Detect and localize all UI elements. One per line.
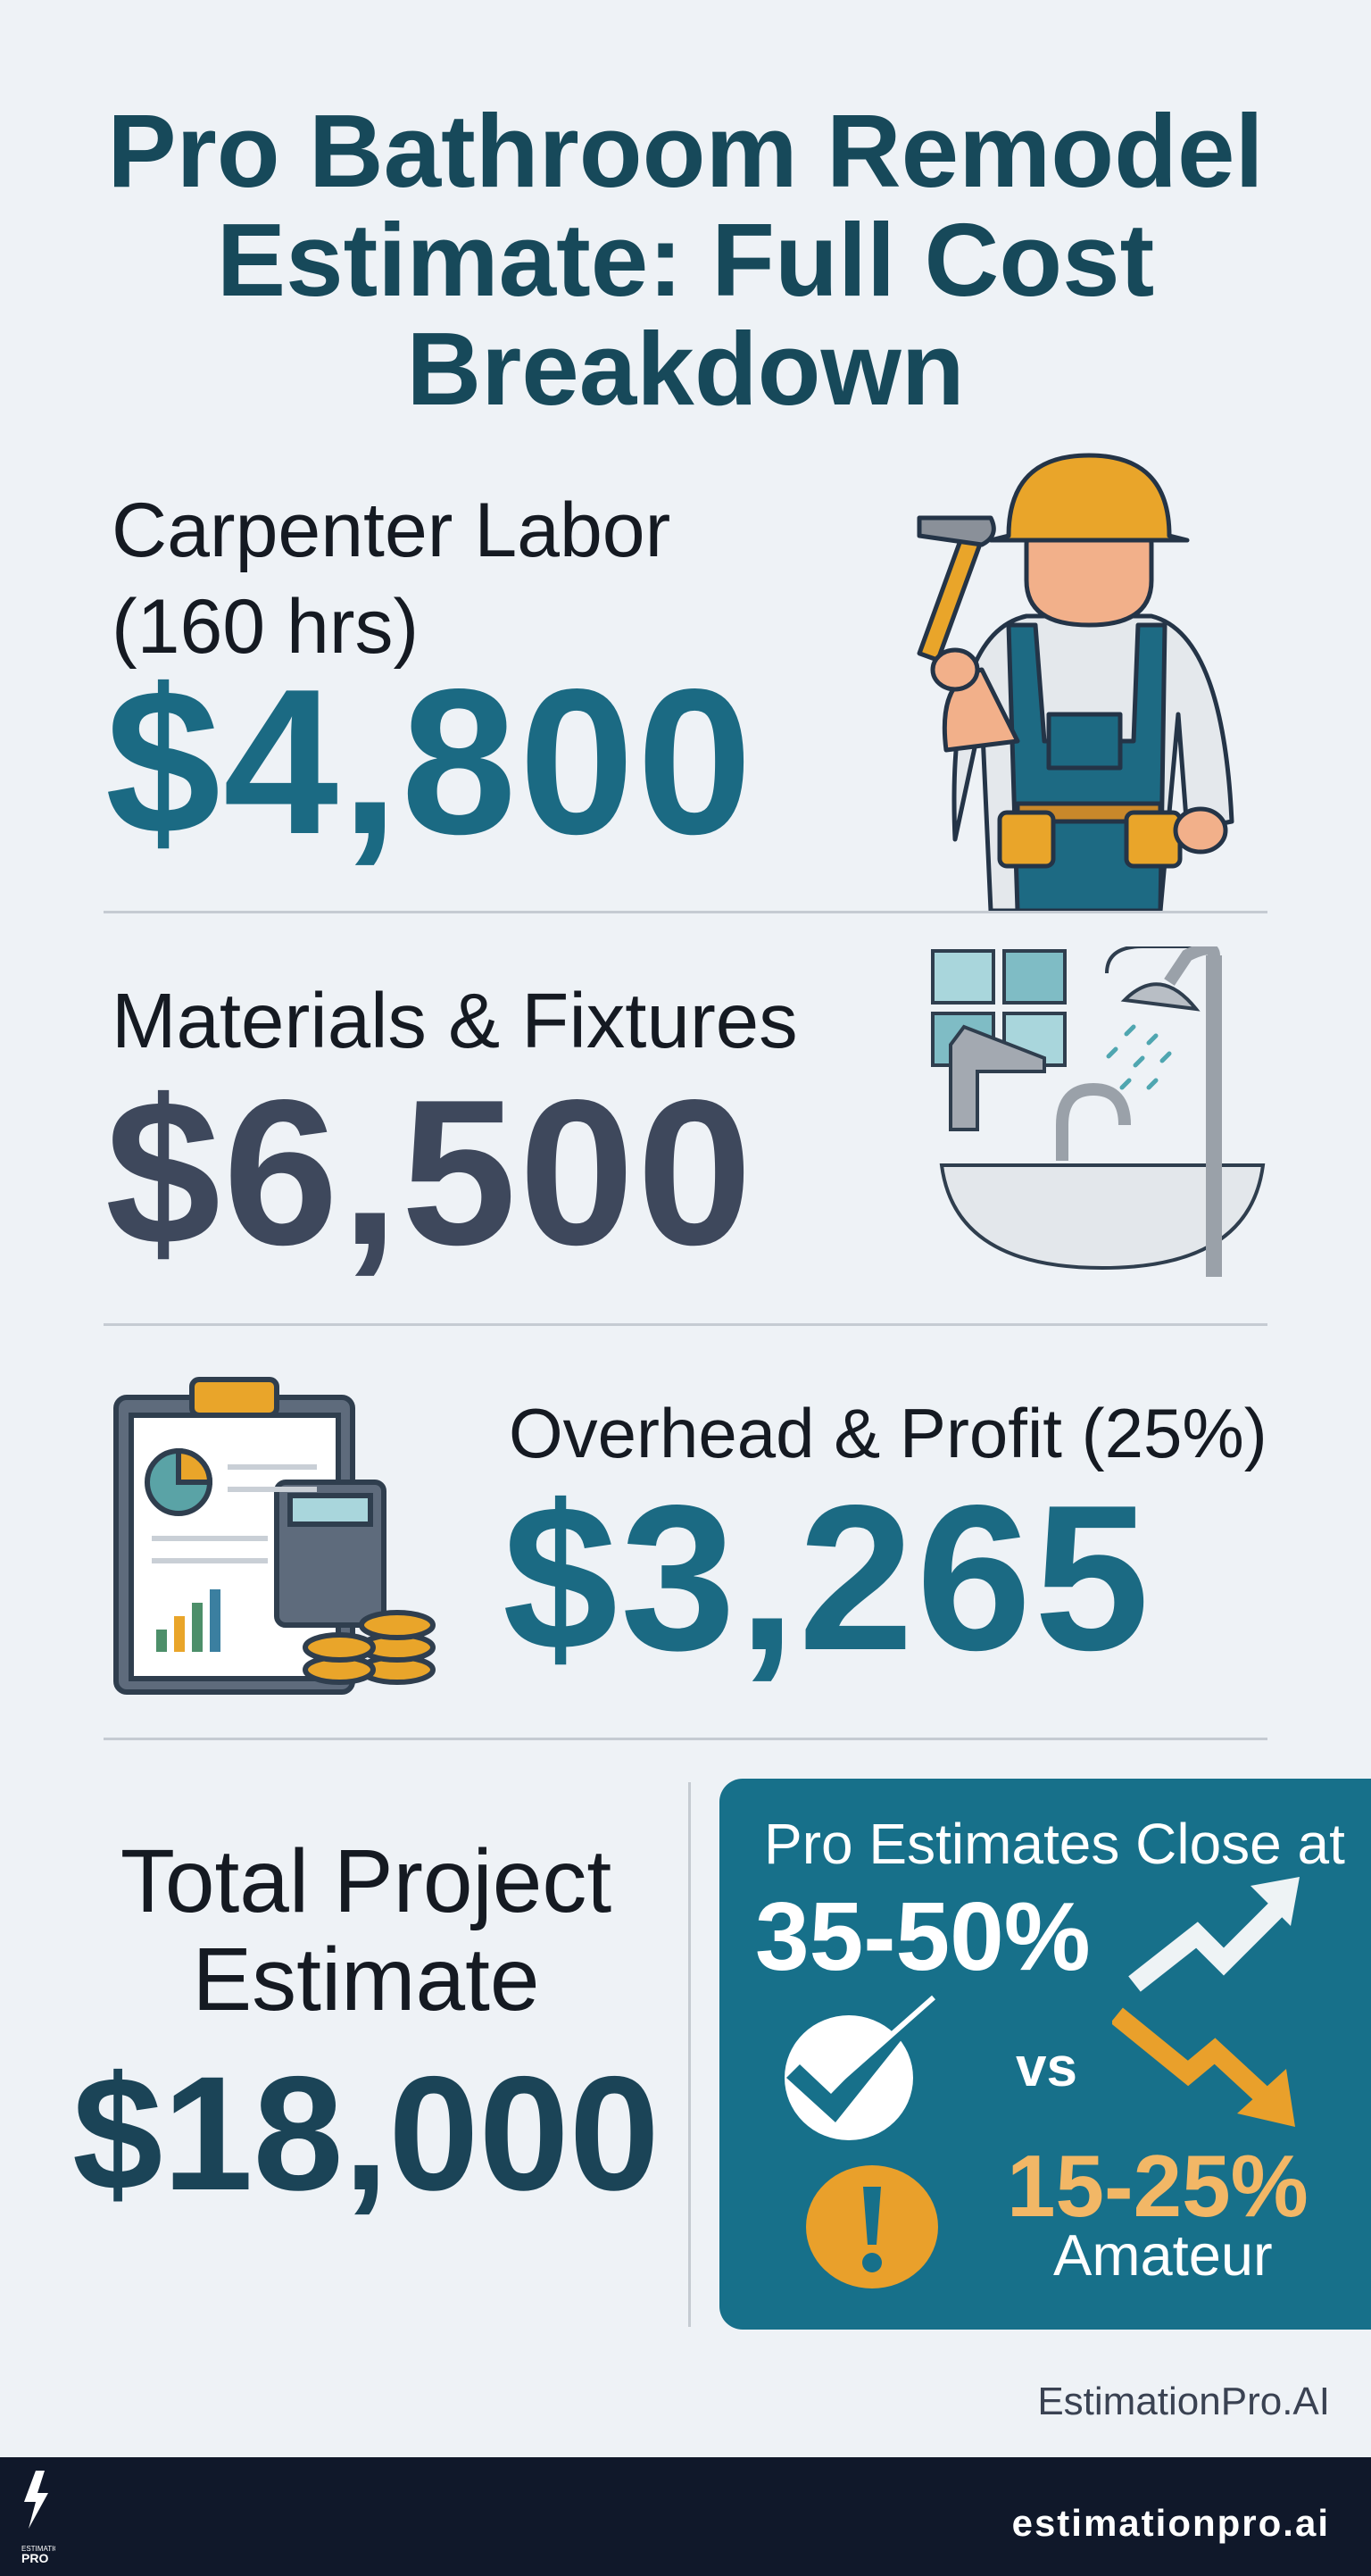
label: materials: Materials & Fixtures (112, 978, 798, 1064)
icon: warning (806, 2165, 938, 2288)
value: total: $18,000 (72, 2042, 660, 2224)
icon: bathroom fixtures (931, 946, 1266, 1277)
panel: close rates (719, 1779, 1371, 2330)
value: labor cost: $4,800 (105, 646, 755, 878)
total estimate block (72, 1831, 660, 2224)
title (107, 93, 1264, 427)
footer url: estimationpro.ai (1012, 2502, 1330, 2544)
label: carpenter labor: Carpenter Labor (112, 488, 670, 573)
label: total: Estimate (192, 1930, 539, 2030)
stat: pro rate: 35-50% (755, 1882, 1091, 1991)
label: carpenter labor (112, 488, 670, 670)
title: Pro Bathroom Remodel (107, 93, 1264, 209)
heading: pro close: Pro Estimates Close at (764, 1812, 1345, 1876)
label: amateur: Amateur (1053, 2222, 1273, 2288)
footer logo (21, 2471, 55, 2564)
label: carpenter labor: (160 hrs) (112, 584, 419, 670)
value: overhead cost: $3,265 (503, 1463, 1152, 1694)
title: Breakdown (406, 311, 965, 427)
arrow: up (1128, 1877, 1300, 1992)
label: overhead: Overhead & Profit (25%) (509, 1394, 1267, 1472)
arrow: down (1112, 2007, 1295, 2127)
value: materials cost: $6,500 (105, 1057, 755, 1288)
credit: EstimationPro.AI (1037, 2380, 1330, 2423)
label: total (120, 1831, 611, 2030)
label: total: Total Project (120, 1831, 611, 1931)
vs: vs (1016, 2037, 1077, 2098)
footer bar (0, 2457, 1371, 2576)
title: Estimate: Full Cost (217, 202, 1154, 318)
icon: check (785, 1995, 935, 2140)
icon: carpenter (918, 454, 1234, 911)
stat: amateur rate: 15-25% (1007, 2137, 1309, 2235)
icon: clipboard with calculator (113, 1377, 436, 1695)
